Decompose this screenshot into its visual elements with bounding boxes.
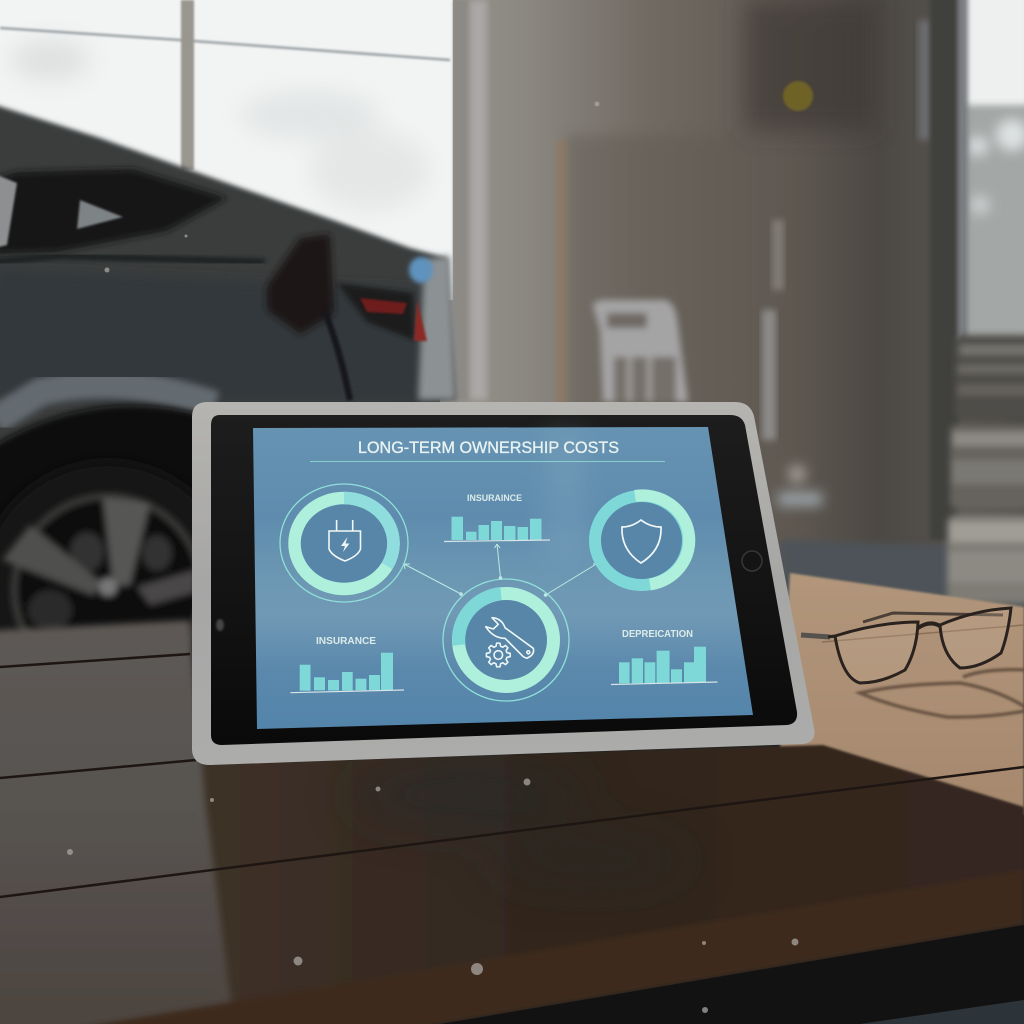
left chart label: INSURANCE [316,635,376,647]
dark floor corner [860,1000,1024,1024]
ring: maintenance [443,576,569,701]
tablet screen [253,427,753,729]
background: window [0,0,470,400]
right bar chart [611,647,718,684]
red side marker [414,300,427,341]
background: right opening [960,0,1024,340]
table front edge [65,870,1024,1024]
stacked tires [947,335,1024,604]
background: dark door post [930,0,968,540]
right chart label: DEPREICATION [622,628,693,640]
car body [0,100,456,640]
red taillight [360,298,407,314]
top bar chart [444,517,550,542]
background: lower garage clutter [778,465,822,506]
wheel arch and tire [0,405,205,640]
top chart label: INSURAINCE [467,493,522,503]
eyeglasses [801,608,1024,717]
home button [742,551,762,571]
car side window [0,169,227,254]
charging plug [267,234,334,334]
tablet bezel [211,415,797,745]
ring: energy [280,484,408,602]
icon: shield [622,520,661,563]
ring: insurance shield [595,495,689,585]
bridge [918,623,940,628]
background: floor [780,540,1024,620]
left lens [828,622,918,683]
rear pillar glass [0,174,17,248]
belt line [0,256,265,262]
icon: plug with bolt [329,520,360,561]
window reflection [77,200,123,229]
connector node dots [459,576,547,597]
title rule [310,460,665,462]
blue light [409,257,433,283]
front temple [801,635,830,637]
background: light post and wall details [470,0,932,555]
electric car [0,100,456,718]
floating dust particles [67,102,798,1013]
table top weathered left side [0,620,240,1024]
bezel reflection [216,619,224,631]
glasses shadow [860,670,1024,717]
back temple [863,613,1003,622]
background: white chair [593,300,688,402]
right lens [940,608,1011,668]
wheel rim [2,493,205,687]
table underside [405,925,1024,1024]
title: LONG-TERM OWNERSHIP COSTS [358,438,619,457]
car lower panel shading [0,270,430,400]
shadow patch reflection [350,770,690,880]
icon: wrench and gear [486,618,534,667]
taillight housing [337,283,414,340]
fender arch highlight [0,384,215,420]
table top lit wood [780,573,1024,815]
connector arrows [404,544,598,595]
background: garage wall [440,0,1024,640]
left bar chart [290,653,404,693]
tablet frame [192,402,814,765]
rear silver trim [418,255,456,400]
background: yellow lamp [783,81,813,111]
tire sidewall [0,462,236,718]
table top shadowed side [40,745,1024,1024]
table plank gaps [0,625,1024,897]
screen reflection [540,430,590,560]
tablet [192,402,814,765]
charging cable [325,312,350,400]
